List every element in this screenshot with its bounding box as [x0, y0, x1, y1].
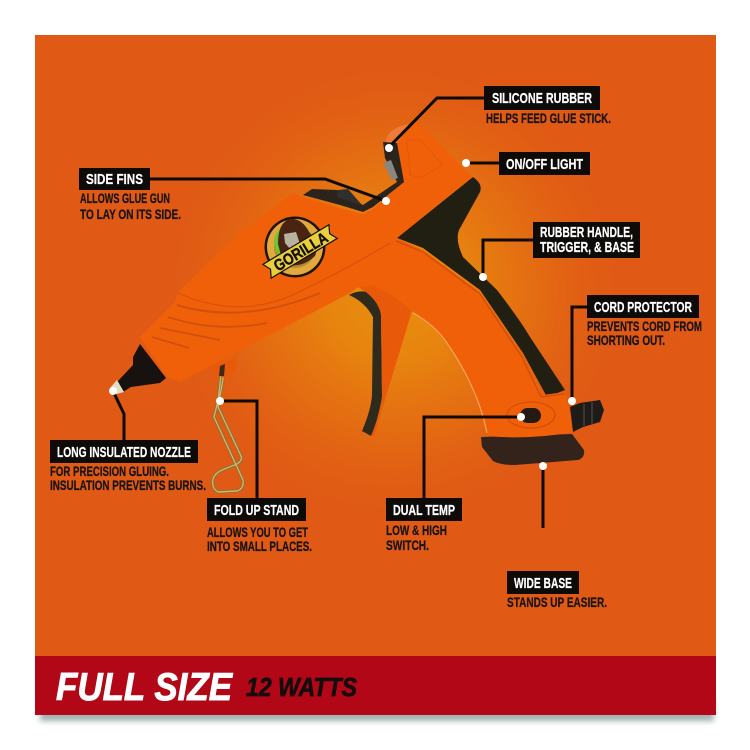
- callout: cord protector: PREVENTS CORD FROM: [587, 318, 702, 334]
- callout: silicone rubber: [385, 86, 611, 152]
- nozzle metal tip: [110, 380, 124, 395]
- glue gun illustration: [110, 122, 604, 492]
- footer wattage: 12 WATTS: [246, 672, 358, 702]
- callout: rubber handle: RUBBER HANDLE,: [540, 224, 633, 241]
- silicone feed wheel: [383, 160, 398, 180]
- callout: wide base: WIDE BASE: [514, 575, 572, 592]
- gun base: [481, 434, 584, 465]
- stand mount: [210, 358, 237, 378]
- callout: fold up stand: ALLOWS YOU TO GET: [207, 524, 308, 540]
- callout: cord protector: [568, 295, 702, 405]
- callout: on/off light: [462, 152, 590, 175]
- fold up stand wire: [213, 366, 243, 492]
- gorilla logo: [263, 216, 338, 280]
- callout: silicone rubber: HELPS FEED GLUE STICK.: [486, 110, 611, 126]
- callout: dual temp: [386, 413, 525, 553]
- temperature switch: [507, 402, 555, 428]
- side fin ridges: [337, 189, 362, 205]
- callout: cord protector: SHORTING OUT.: [587, 332, 665, 348]
- footer title: FULL SIZE: [56, 666, 233, 709]
- callout: dual temp: LOW & HIGH: [386, 522, 447, 538]
- panel shadow: [40, 700, 714, 721]
- callout: side fins: ALLOWS GLUE GUN: [80, 190, 170, 206]
- callout: long insulated nozzle: FOR PRECISION GLUING.: [50, 463, 169, 479]
- callout: side fins: TO LAY ON ITS SIDE.: [80, 206, 181, 222]
- callout: cord protector: CORD PROTECTOR: [594, 299, 692, 316]
- gun body: [140, 122, 574, 437]
- callout: long insulated nozzle: INSULATION PREVENTS BURNS.: [50, 477, 206, 493]
- callout: wide base: [507, 462, 607, 610]
- callout: fold up stand: [207, 397, 312, 554]
- callout: fold up stand: FOLD UP STAND: [214, 502, 299, 519]
- panel: orange background: [35, 35, 716, 657]
- callout: rubber handle: [479, 222, 640, 281]
- background glow behind gun: [160, 55, 630, 525]
- gun rear orange tip: [386, 122, 416, 150]
- black fin groove: [303, 142, 404, 212]
- callout: side fins: SIDE FINS: [86, 171, 143, 188]
- gun nozzle: [117, 344, 166, 392]
- callout: side fins: [79, 168, 390, 222]
- shell seam and grooves: [152, 140, 565, 433]
- callout: silicone rubber: SILICONE RUBBER: [492, 90, 592, 107]
- callout: rubber handle: TRIGGER, & BASE: [540, 239, 634, 256]
- callout: long insulated nozzle: [50, 387, 206, 493]
- trigger dark part: [349, 291, 382, 436]
- cord protector: [570, 400, 604, 432]
- callout: wide base: STANDS UP EASIER.: [507, 594, 607, 610]
- logo banner: GORILLA: [271, 230, 332, 275]
- callout: fold up stand: INTO SMALL PLACES.: [207, 538, 312, 554]
- callout: long insulated nozzle: LONG INSULATED NOZZLE: [57, 444, 191, 461]
- trigger orange part: [358, 285, 412, 436]
- callout: dual temp: SWITCH.: [386, 537, 429, 553]
- callout: on/off light: ON/OFF LIGHT: [506, 156, 583, 173]
- rubber handle: [397, 177, 565, 397]
- footer band: [35, 656, 716, 715]
- stand slot: [219, 364, 225, 376]
- callout: dual temp: DUAL TEMP: [393, 502, 455, 519]
